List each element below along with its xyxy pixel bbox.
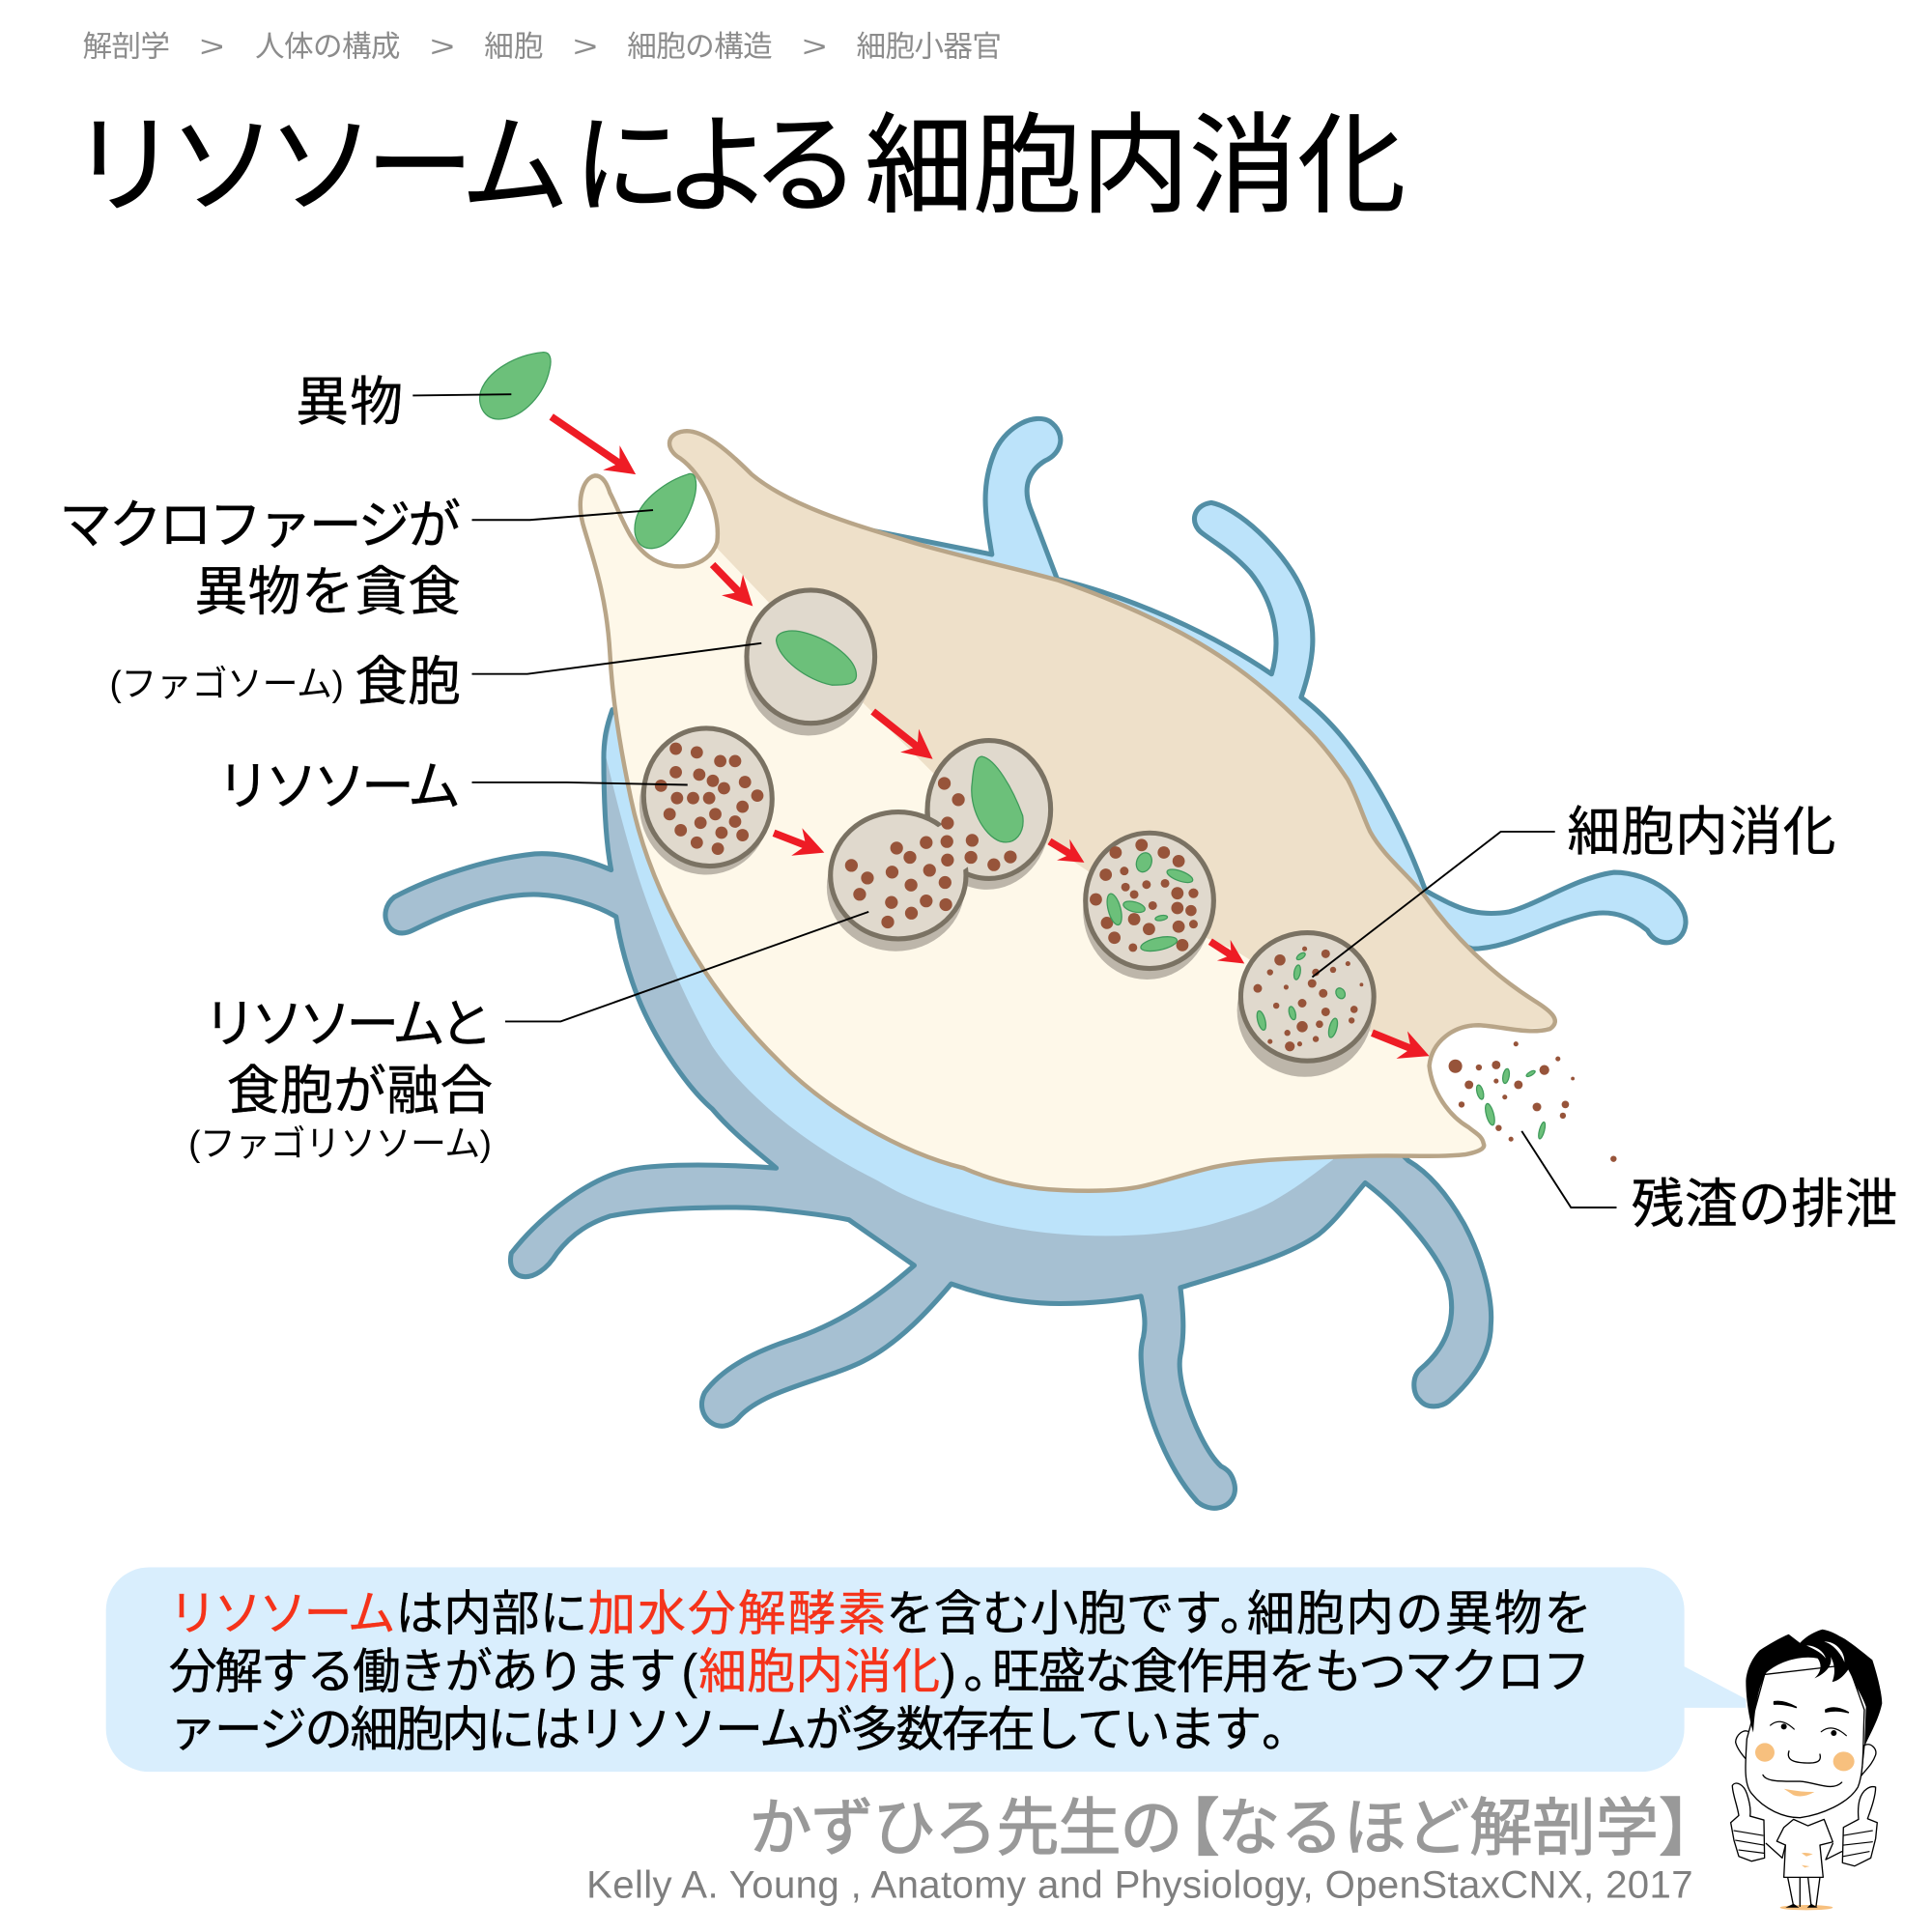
engulfed foreign body [635, 473, 696, 549]
breadcrumb: > [573, 31, 598, 64]
phagolysosome: fusing vesicles [827, 741, 1051, 952]
label: macrophage engulfs: マクロファージが [59, 495, 461, 554]
series title: なるほど解剖学 [1217, 1793, 1659, 1863]
cheeks [1755, 1743, 1775, 1762]
explanation text [169, 1586, 1592, 1756]
label: intracellular digestion: 細胞内消化 [1567, 802, 1836, 862]
label: macrophage engulfs: 異物を貪食 [195, 561, 461, 621]
explanation text: リソソーム [169, 1586, 395, 1641]
residual vesicle [1237, 933, 1374, 1077]
label: fusion: 食胞が融合 [227, 1061, 493, 1121]
shadow [1780, 1905, 1833, 1910]
breadcrumb: > [200, 31, 224, 64]
explanation text: は内部に [395, 1586, 587, 1641]
label: intracellular digestion [1312, 802, 1836, 977]
series title: かずひろ先生の [750, 1793, 1182, 1863]
breadcrumb: > [802, 31, 827, 64]
explanation text: ァージの細胞内にはリソソームが多数存在しています [169, 1702, 1262, 1756]
explanation text: を含む小胞です [886, 1586, 1222, 1641]
series title: 】 [1659, 1793, 1721, 1863]
title: 細胞内消化 [865, 104, 1406, 226]
cytoplasm: tan area [653, 419, 1602, 1057]
explanation text: 旺盛な食作用をもつマクロフ [992, 1644, 1591, 1698]
cell body: upper light region with processes [801, 418, 1686, 949]
citation: Kelly A. Young , Anatomy and Physiology, OpenStaxCNX, 2017 [586, 1862, 1693, 1906]
breadcrumb: 解剖学 [82, 31, 170, 64]
macrophage cell [385, 418, 1686, 1508]
face [1746, 1664, 1864, 1818]
breadcrumb: 細胞 [484, 31, 543, 64]
title: による [573, 104, 860, 226]
right hand [1842, 1787, 1877, 1866]
cell body: light blue band [607, 715, 1333, 1236]
label: residue excretion [1521, 1131, 1897, 1234]
character: doctor giving thumbs up [1731, 1630, 1882, 1910]
label: fusion: (ファゴリソソーム) [188, 1123, 492, 1163]
ears [1736, 1731, 1876, 1776]
label: phagosome: (ファゴソーム) [110, 665, 344, 704]
explanation text: ( [681, 1644, 697, 1698]
lysosome [629, 718, 783, 885]
breadcrumb [82, 31, 1002, 64]
legs [1788, 1877, 1820, 1906]
label: fusion: リソソームと [203, 994, 493, 1054]
breadcrumb: > [430, 31, 455, 64]
series title: 【 [1157, 1793, 1220, 1863]
explanation text: 。 [963, 1644, 1011, 1698]
body [1776, 1819, 1833, 1877]
digesting vesicle [1083, 833, 1213, 980]
cytoplasm outline [581, 431, 1555, 1191]
phagosome [744, 590, 875, 735]
breadcrumb: 細胞の構造 [627, 31, 773, 64]
explanation text: 。 [1262, 1702, 1310, 1756]
title [71, 104, 1406, 226]
explanation text: ) [940, 1644, 956, 1698]
explanation text: 細胞内の異物を [1247, 1586, 1592, 1641]
cytoplasm: cream area [582, 477, 1546, 1188]
explanation text: 加水分解酵素 [587, 1586, 886, 1641]
hair highlights [1806, 1641, 1844, 1662]
label: fusion [188, 912, 868, 1163]
nose and mouth [1788, 1751, 1820, 1763]
series title [750, 1793, 1721, 1863]
left hand [1731, 1783, 1765, 1861]
explanation text: 細胞内消化 [698, 1644, 940, 1698]
explanation text: 分解する働きがあります [169, 1644, 676, 1698]
foreign body leaf [480, 353, 551, 419]
label: residue excretion: 残渣の排泄 [1632, 1174, 1897, 1234]
label: lysosome: リソソーム [216, 756, 461, 816]
label: foreign body: 異物 [296, 372, 403, 432]
speech bubble [106, 1567, 1746, 1772]
breadcrumb: 細胞小器官 [856, 31, 1002, 64]
label: macrophage engulfs [59, 495, 653, 621]
cell body: lower dark region with processes [385, 710, 1492, 1508]
explanation text: 。 [1220, 1586, 1267, 1640]
red arrows [543, 405, 1435, 1069]
hair [1746, 1630, 1882, 1747]
expelled residue [1449, 1041, 1617, 1162]
eyes and brows [1775, 1701, 1848, 1713]
breadcrumb: 人体の構成 [255, 31, 401, 64]
label: phagosome: 食胞 [355, 651, 461, 711]
label: phagosome [110, 643, 761, 711]
title: リソソーム [71, 104, 569, 226]
